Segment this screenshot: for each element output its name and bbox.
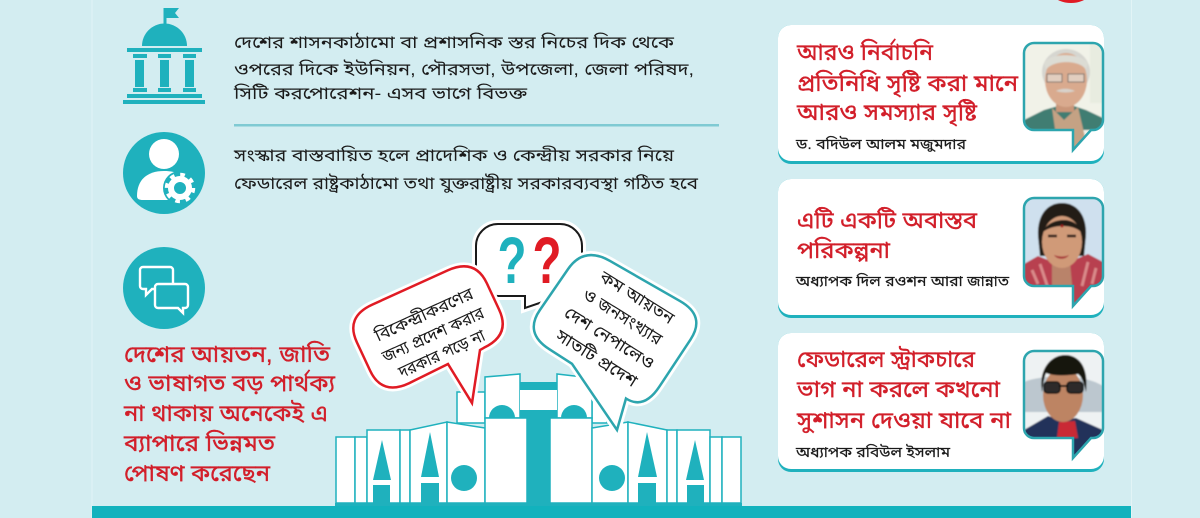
- speech bubble: red, decentralisation: বিকেন্দ্রীকরণের: [370, 283, 477, 346]
- red callout text: [123, 341, 336, 486]
- quote 2 text: এটি একটি অবাস্তব: [797, 207, 977, 233]
- quote 3 text: অধ্যাপক রবিউল ইসলাম: [795, 444, 951, 461]
- quote 1 text: আরও নির্বাচনি: [796, 39, 934, 65]
- text block: federal structure: ফেডারেল রাষ্ট্রকাঠামো তথা যুক্তরাষ্ট্রীয় সরকারব্যবস্থা গঠিত হবে: [234, 172, 699, 194]
- portrait 1: [1024, 43, 1103, 150]
- quote 1 text: ড. বদিউল আলম মজুমদার: [795, 136, 966, 153]
- quote 2 text: [795, 207, 1010, 290]
- speech bubble: question marks: ?: [532, 224, 562, 298]
- speech bubble: teal, Nepal comparison: কম আয়তন: [595, 267, 678, 328]
- speech bubble: teal, Nepal comparison: [534, 255, 696, 430]
- quote 2 text: পরিকল্পনা: [797, 237, 891, 263]
- panel: quote card 1: [778, 25, 1104, 164]
- bottom band: [92, 506, 1131, 518]
- speech bubble: red, decentralisation: দরকার পড়ে না: [395, 326, 488, 382]
- quote 1 text: [795, 39, 1019, 153]
- quote 2 text: অধ্যাপক দিল রওশন আরা জান্নাত: [795, 273, 1010, 290]
- quote 3 text: ফেডারেল স্ট্রাকচারে: [797, 346, 975, 372]
- text block: administrative structure: [233, 31, 694, 103]
- text block: administrative structure: সিটি করপোরেশন- এসব ভাগে বিভক্ত: [233, 83, 528, 103]
- portrait 2: [1024, 198, 1103, 306]
- speech bubble: red, decentralisation: জন্য প্রদেশ করার: [378, 303, 488, 367]
- icon: government building: [123, 8, 205, 104]
- red callout text: ব্যাপারে ভিন্নমত: [123, 430, 276, 456]
- icon: person with gear: [123, 132, 205, 214]
- panel: quote card 3: [778, 333, 1104, 472]
- speech bubble: question marks: ?: [497, 224, 527, 298]
- red callout text: দেশের আয়তন, জাতি: [124, 341, 331, 367]
- icon: chat bubbles: [123, 247, 205, 329]
- speech bubble: teal, Nepal comparison: ও জনসংখ্যার: [579, 285, 666, 349]
- speech bubble: teal, Nepal comparison: সাতটি প্রদেশ: [552, 325, 641, 391]
- quote 3 text: [795, 346, 1012, 461]
- quote 3 text: ভাগ না করলে কখনো: [796, 376, 1001, 402]
- text block: federal structure: সংস্কার বাস্তবায়িত হলে প্রাদেশিক ও কেন্দ্রীয় সরকার নিয়ে: [233, 145, 674, 165]
- quote 3 text: সুশাসন দেওয়া যাবে না: [796, 407, 1012, 434]
- text block: federal structure: [233, 145, 699, 194]
- speech bubble: question marks: [476, 224, 582, 308]
- text block: administrative structure: ওপরের দিকে ইউনিয়ন, পৌরসভা, উপজেলা, জেলা পরিষদ,: [234, 59, 694, 79]
- quote 1 text: আরও সমস্যার সৃষ্টি: [796, 99, 978, 127]
- red circle at top edge: [1041, 0, 1101, 3]
- speech bubble: teal, Nepal comparison: দেশ নেপালেও: [561, 303, 658, 373]
- red callout text: পোষণ করেছেন: [124, 460, 271, 486]
- panel: quote card 2: [778, 179, 1104, 318]
- red callout text: না থাকায় অনেকেই এ: [123, 400, 328, 426]
- portrait 3: [1024, 351, 1103, 458]
- red callout text: ও ভাষাগত বড় পার্থক্য: [124, 370, 336, 396]
- text block: administrative structure: দেশের শাসনকাঠামো বা প্রশাসনিক স্তর নিচের দিক থেকে: [234, 31, 674, 52]
- illustration: parliament building: [335, 374, 742, 506]
- speech bubble: red, decentralisation: [353, 266, 503, 403]
- quote 1 text: প্রতিনিধি সৃষ্টি করা মানে: [797, 70, 1019, 98]
